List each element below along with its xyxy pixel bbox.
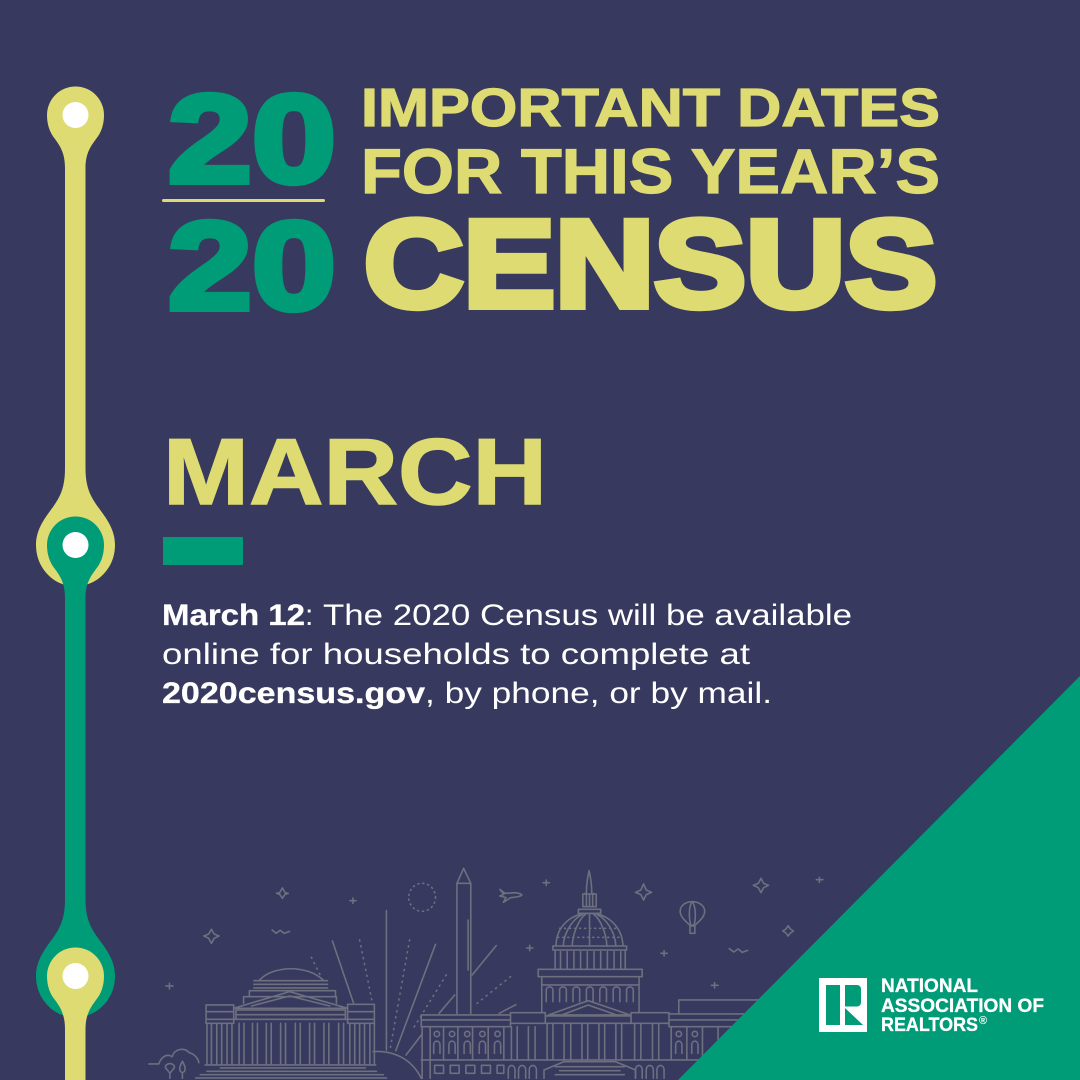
accent bar xyxy=(163,537,243,565)
numeral: upper 20: 20 xyxy=(168,70,336,209)
heading: March: MARCH xyxy=(163,419,547,524)
timeline node: March xyxy=(36,468,115,598)
Jefferson Memorial xyxy=(196,969,386,1078)
body text: : xyxy=(305,599,313,632)
US Capitol xyxy=(421,871,765,1078)
organisation name: NATIONAL xyxy=(881,975,978,997)
body text: , by phone, or by mail. xyxy=(425,677,772,710)
body text xyxy=(162,599,852,710)
organisation name: ® xyxy=(979,1015,987,1027)
illustration: Washington DC skyline xyxy=(149,868,823,1078)
sun xyxy=(373,1051,421,1078)
trees xyxy=(149,1049,199,1078)
body text: The 2020 Census will be available xyxy=(323,599,852,632)
title line 2: FOR THIS YEAR’S xyxy=(361,137,940,207)
body text: March 12 xyxy=(162,599,305,632)
hot air balloon xyxy=(680,902,705,933)
Washington Monument xyxy=(457,868,471,1013)
airplane xyxy=(500,889,522,902)
divider line xyxy=(162,199,325,202)
timeline xyxy=(36,87,115,1080)
organisation name: ASSOCIATION OF xyxy=(881,995,1044,1017)
organisation name xyxy=(881,975,1044,1036)
organisation name: REALTORS xyxy=(881,1014,978,1036)
icon: realtor R block xyxy=(819,978,867,1032)
numeral: lower 20: 20 xyxy=(168,197,336,336)
logo: National Association of Realtors xyxy=(819,975,1044,1036)
sparkles and stars xyxy=(204,878,794,943)
body text: online for households to complete at xyxy=(162,638,751,671)
timeline node: top xyxy=(47,87,104,168)
corner triangle xyxy=(678,676,1080,1080)
timeline segment: lower yellow line xyxy=(65,1010,86,1080)
timeline segment: green line xyxy=(65,580,86,910)
body text: 2020census.gov xyxy=(162,677,425,710)
title xyxy=(361,78,940,334)
dotted circle xyxy=(409,883,436,911)
title line 1: IMPORTANT DATES xyxy=(361,78,940,138)
title line 3: CENSUS xyxy=(364,196,937,334)
logo mark: 20/20 xyxy=(162,70,336,336)
sun rays xyxy=(332,911,516,1055)
timeline node: next date xyxy=(36,899,115,1029)
timeline segment: yellow line xyxy=(65,160,86,480)
